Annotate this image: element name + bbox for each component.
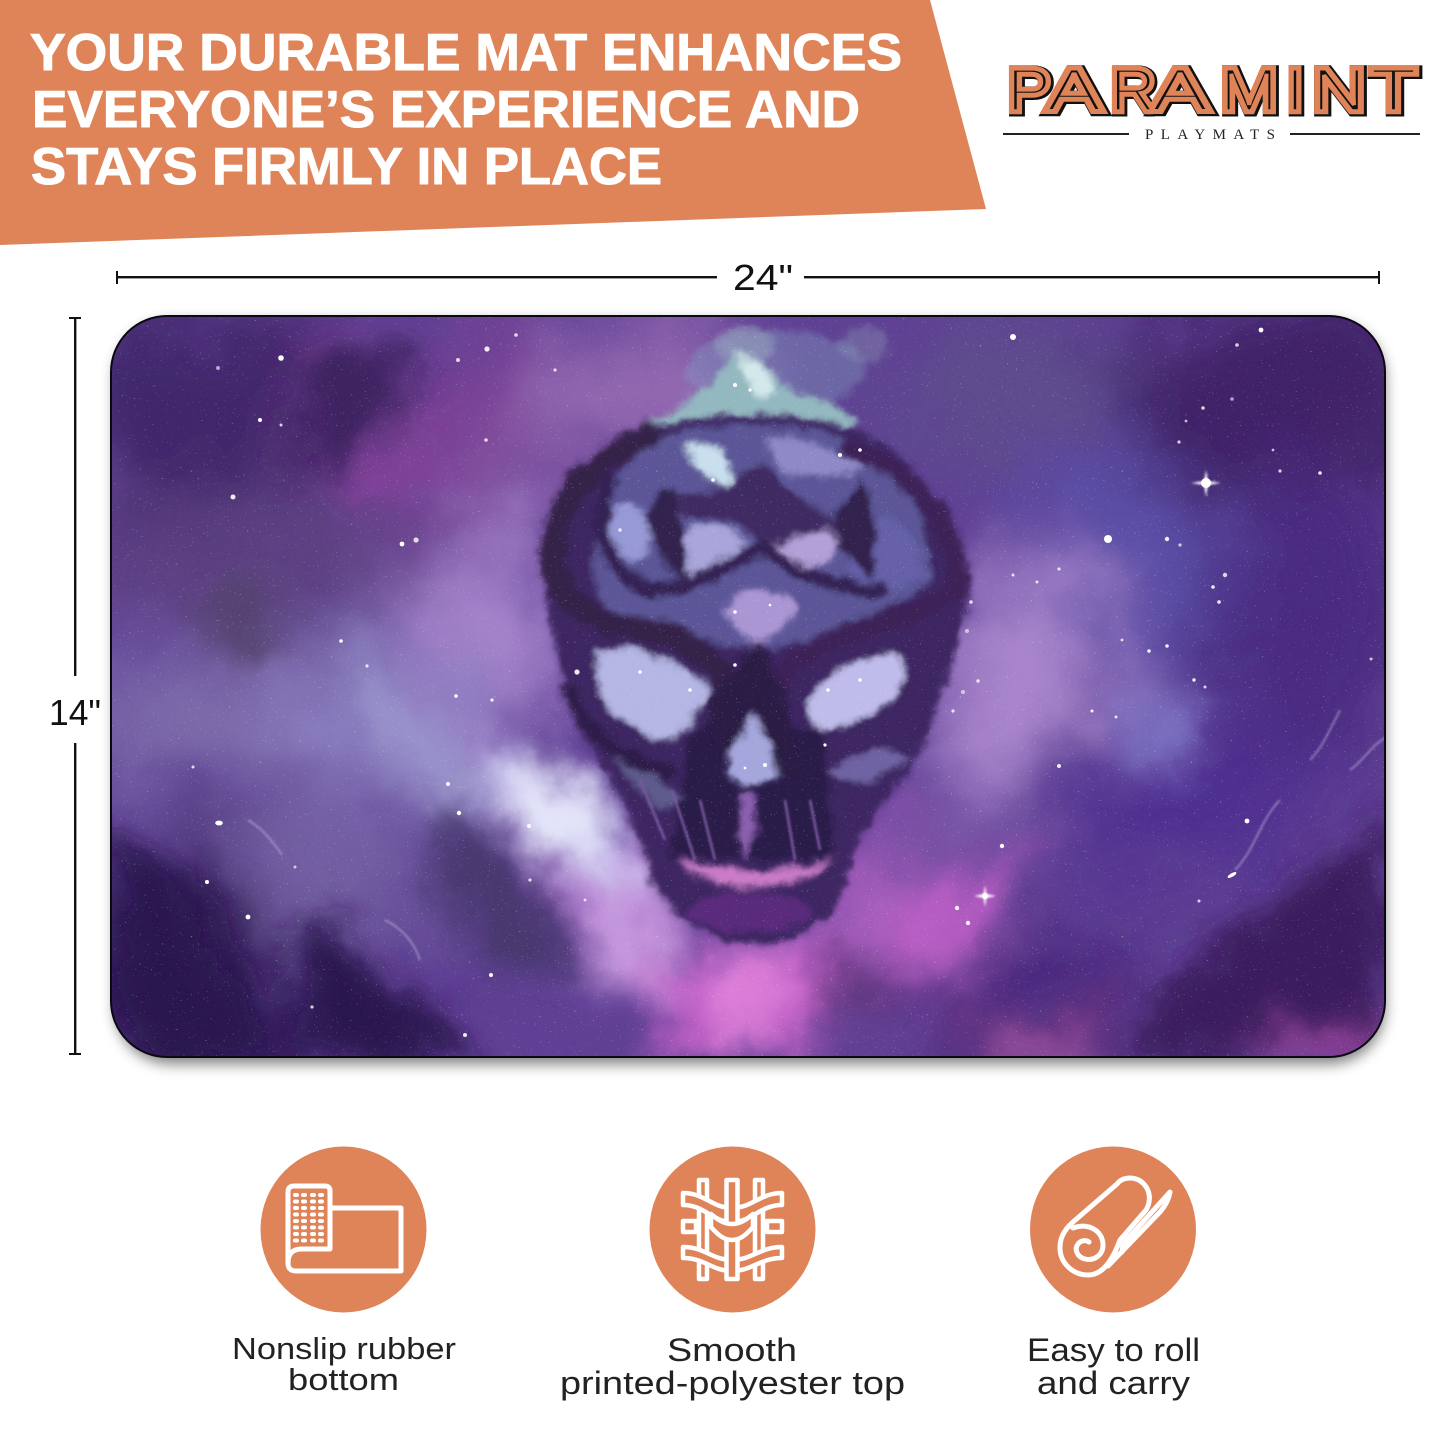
icon: woven fabric — [650, 1146, 816, 1312]
header banner — [0, 0, 986, 245]
logo: Paramint Playmats: P — [1007, 56, 1051, 124]
teal crown — [640, 327, 890, 437]
label: easy to roll and carry — [1027, 1332, 1200, 1401]
logo: Paramint Playmats: I — [1286, 56, 1304, 124]
logo: Paramint Playmats: A — [1046, 56, 1102, 124]
stars — [192, 328, 1372, 1037]
label: nonslip rubber bottom — [232, 1331, 456, 1397]
logo: Paramint Playmats: P — [1007, 56, 1051, 124]
headline — [30, 24, 902, 196]
sparkle stars — [974, 470, 1221, 907]
logo: Paramint Playmats: N — [1312, 56, 1366, 124]
label: smooth printed-polyester top: printed-polyester top — [560, 1365, 905, 1401]
logo: Paramint Playmats: M — [1220, 56, 1278, 124]
label: easy to roll and carry: and carry — [1037, 1365, 1190, 1401]
logo: Paramint Playmats: P — [1008, 57, 1052, 125]
crown fill — [594, 425, 931, 650]
logo: Paramint Playmats: PLAYMATS — [1145, 127, 1275, 143]
dark centre mass and horns — [668, 462, 838, 546]
feature: easy to roll and carry — [1027, 1146, 1200, 1401]
logo: Paramint Playmats: A — [1046, 56, 1102, 124]
lower face dark — [670, 719, 835, 860]
logo: Paramint Playmats: R — [1110, 56, 1156, 124]
mouth — [675, 856, 836, 932]
feature: nonslip rubber bottom — [232, 1146, 456, 1397]
icon: rubber mat with grip dots — [260, 1146, 426, 1312]
width dimension: 24 inches: 24" — [733, 257, 793, 298]
logo: Paramint Playmats: A — [1048, 57, 1104, 125]
headline: YOUR DURABLE MAT ENHANCES — [30, 24, 902, 82]
label: easy to roll and carry: Easy to roll — [1027, 1332, 1200, 1368]
headline: EVERYONE’S EXPERIENCE AND — [32, 81, 860, 139]
skull — [545, 415, 967, 945]
logo: Paramint Playmats: I — [1286, 56, 1304, 124]
mat border — [111, 316, 1385, 1057]
label: smooth printed-polyester top: Smooth — [667, 1332, 797, 1368]
upper light patches — [685, 444, 733, 487]
wispy details — [248, 710, 1390, 960]
logo: Paramint Playmats: R — [1112, 57, 1158, 125]
label: nonslip rubber bottom: bottom — [288, 1362, 399, 1397]
logo: Paramint Playmats: M — [1222, 57, 1280, 125]
headline: STAYS FIRMLY IN PLACE — [31, 138, 662, 196]
playmat artwork: nebula skull — [110, 315, 1386, 1058]
nose — [708, 640, 795, 860]
feature: smooth printed-polyester top — [560, 1146, 905, 1401]
logo: Paramint Playmats: M — [1220, 56, 1278, 124]
logo: Paramint Playmats: A — [1152, 57, 1211, 125]
logo: Paramint Playmats: A — [1151, 56, 1209, 124]
star dust — [111, 316, 1385, 1057]
brow ridges and ring — [552, 435, 960, 772]
mat shadow — [115, 322, 1385, 1064]
logo: Paramint Playmats: A — [1151, 56, 1209, 124]
logo: Paramint Playmats: R — [1110, 56, 1156, 124]
logo: Paramint Playmats: T — [1370, 56, 1417, 124]
nebula bright folds and dark bands — [111, 341, 1390, 1070]
teeth streaks — [640, 780, 820, 860]
logo: Paramint Playmats: N — [1314, 57, 1368, 125]
logo: Paramint Playmats — [1003, 56, 1420, 143]
icon: rolled mat — [1030, 1146, 1196, 1312]
label: smooth printed-polyester top — [560, 1332, 905, 1401]
logo: Paramint Playmats: I — [1288, 57, 1306, 125]
logo: Paramint Playmats: T — [1370, 56, 1417, 124]
nebula background clouds — [112, 317, 1384, 1056]
eyes — [597, 649, 712, 742]
logo: Paramint Playmats: T — [1372, 57, 1418, 125]
height dimension: 14 inches: 14" — [49, 692, 101, 733]
label: nonslip rubber bottom: Nonslip rubber — [232, 1331, 456, 1366]
logo: Paramint Playmats: N — [1312, 56, 1366, 124]
